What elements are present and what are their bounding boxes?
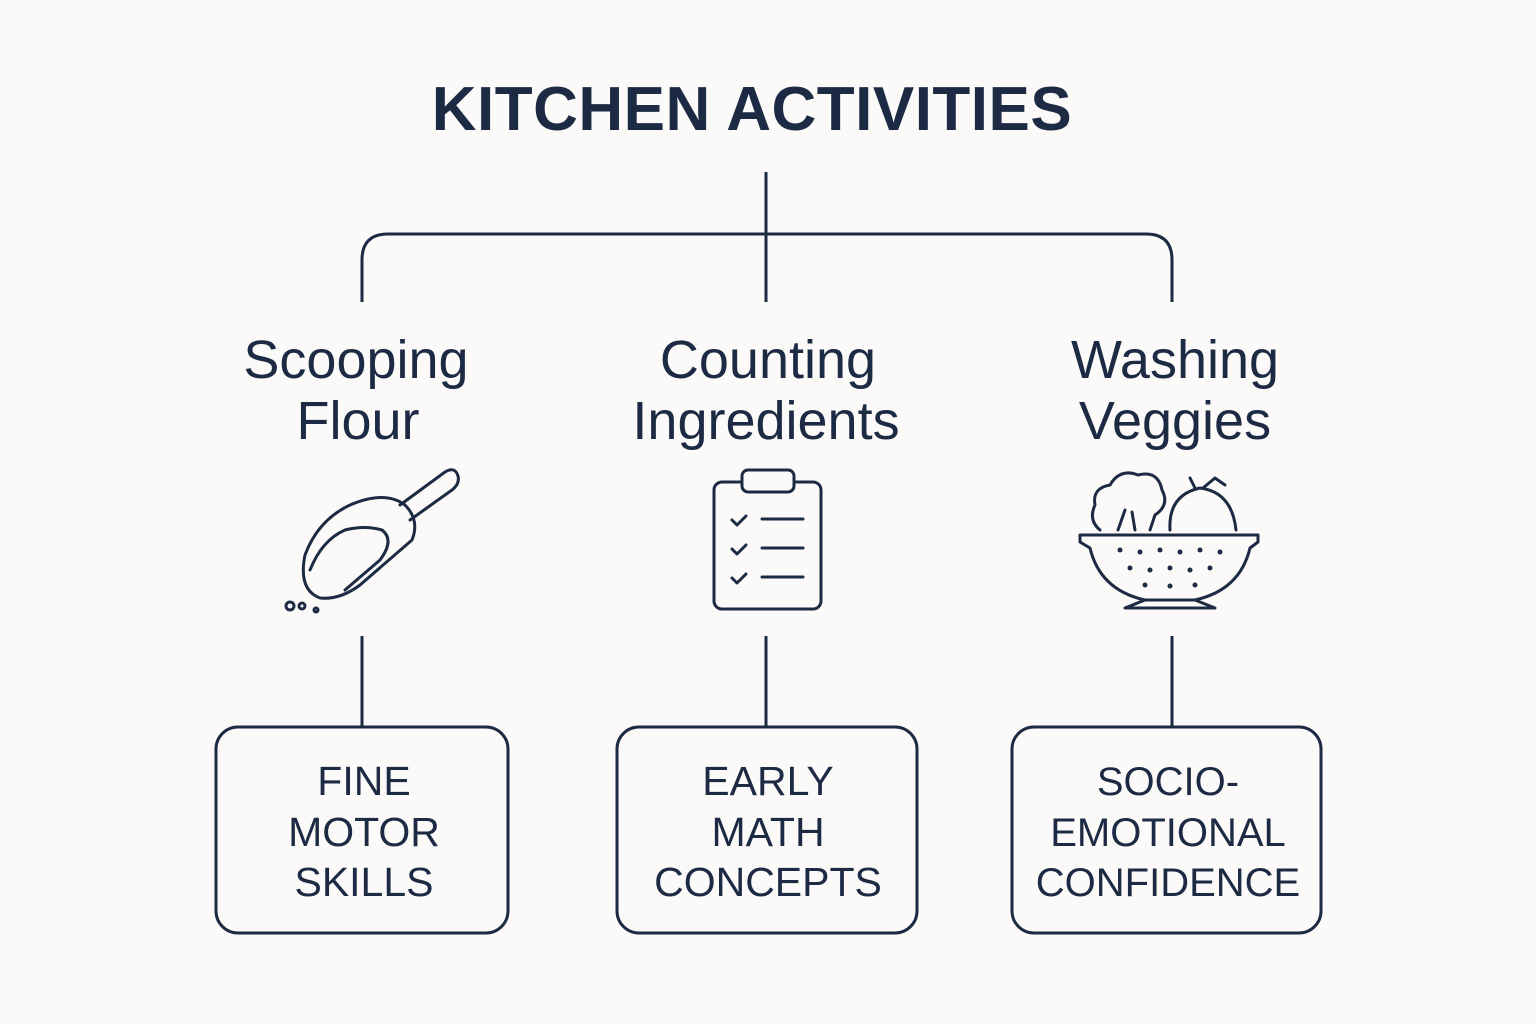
box: early math concepts: EARLY xyxy=(702,758,834,804)
connector tree xyxy=(362,172,1172,302)
box: early math concepts: MATH xyxy=(711,809,825,855)
label: scooping flour xyxy=(243,330,469,451)
label: scooping flour: Scooping xyxy=(243,330,469,390)
box: socio-emotional confidence xyxy=(1012,727,1321,933)
label: counting ingredients xyxy=(632,330,900,451)
box: socio-emotional confidence: SOCIO- xyxy=(1097,760,1239,804)
icon: flour scoop xyxy=(286,470,458,612)
label: counting ingredients: Counting xyxy=(660,330,876,390)
box: early math concepts xyxy=(617,727,917,933)
label: washing veggies: Washing xyxy=(1071,330,1279,390)
box: early math concepts: CONCEPTS xyxy=(654,859,882,905)
label: washing veggies xyxy=(1071,330,1279,451)
box: fine motor skills xyxy=(216,727,508,933)
icon: colander with veggies xyxy=(1080,473,1258,608)
box: socio-emotional confidence: EMOTIONAL xyxy=(1050,811,1286,855)
box: fine motor skills: MOTOR xyxy=(288,809,440,855)
connectors down xyxy=(362,636,1172,727)
label: washing veggies: Veggies xyxy=(1079,391,1271,451)
box: fine motor skills: FINE xyxy=(317,758,411,804)
box: fine motor skills: SKILLS xyxy=(294,859,434,905)
label: counting ingredients: Ingredients xyxy=(632,391,900,451)
icon: clipboard checklist xyxy=(714,470,821,609)
label: scooping flour: Flour xyxy=(296,391,420,451)
box: socio-emotional confidence: CONFIDENCE xyxy=(1036,861,1300,905)
title: KITCHEN ACTIVITIES xyxy=(432,75,1072,144)
